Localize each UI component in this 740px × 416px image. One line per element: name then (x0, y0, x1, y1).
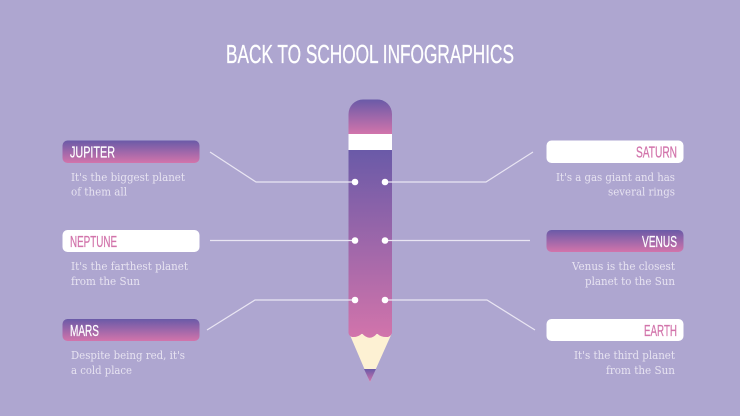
earth text: It's the third planet (574, 349, 676, 362)
jupiter text (71, 171, 186, 198)
earth label (546, 319, 684, 341)
jupiter text: of them all (71, 186, 127, 198)
saturn text: several rings (608, 186, 675, 198)
panel: neptune (62, 230, 200, 288)
pencil cone (350, 334, 392, 382)
panel: jupiter: JUPITER (70, 144, 115, 162)
venus text: Venus is the closest (571, 260, 676, 273)
panel: saturn (546, 140, 684, 198)
saturn text: It's a gas giant and has (556, 171, 675, 184)
mars text: Despite being red, it's (71, 349, 185, 362)
title: BACK TO SCHOOL INFOGRAPHICS (226, 39, 514, 69)
panel: jupiter (62, 140, 200, 198)
pencil white band (348, 134, 392, 150)
pencil eraser (348, 100, 392, 134)
panel: earth (546, 319, 684, 377)
panel: venus: VENUS (642, 234, 677, 251)
mars text: a cold place (71, 364, 132, 377)
panel: neptune: NEPTUNE (70, 234, 117, 251)
venus text (571, 260, 676, 288)
venus text: planet to the Sun (585, 275, 675, 288)
neptune label (62, 230, 200, 252)
jupiter label (62, 140, 200, 163)
mars label (62, 319, 200, 341)
panel: venus (546, 230, 684, 288)
pencil (348, 100, 392, 382)
panel: mars (62, 319, 200, 377)
earth text (574, 349, 676, 377)
pencil body (348, 150, 392, 338)
connector dots (352, 179, 388, 303)
panel: saturn: SATURN (636, 144, 677, 162)
mars text (71, 349, 185, 377)
jupiter text: It's the biggest planet (71, 171, 186, 184)
panel: mars: MARS (70, 323, 99, 340)
saturn text (556, 171, 675, 198)
saturn label (546, 140, 684, 163)
neptune text: It's the farthest planet (71, 260, 189, 273)
venus label (546, 230, 684, 252)
earth text: from the Sun (606, 364, 675, 377)
neptune text (71, 260, 189, 288)
neptune text: from the Sun (71, 275, 140, 288)
pencil lead tip (364, 369, 376, 382)
panel: earth: EARTH (644, 323, 677, 340)
connector lines (207, 152, 535, 330)
